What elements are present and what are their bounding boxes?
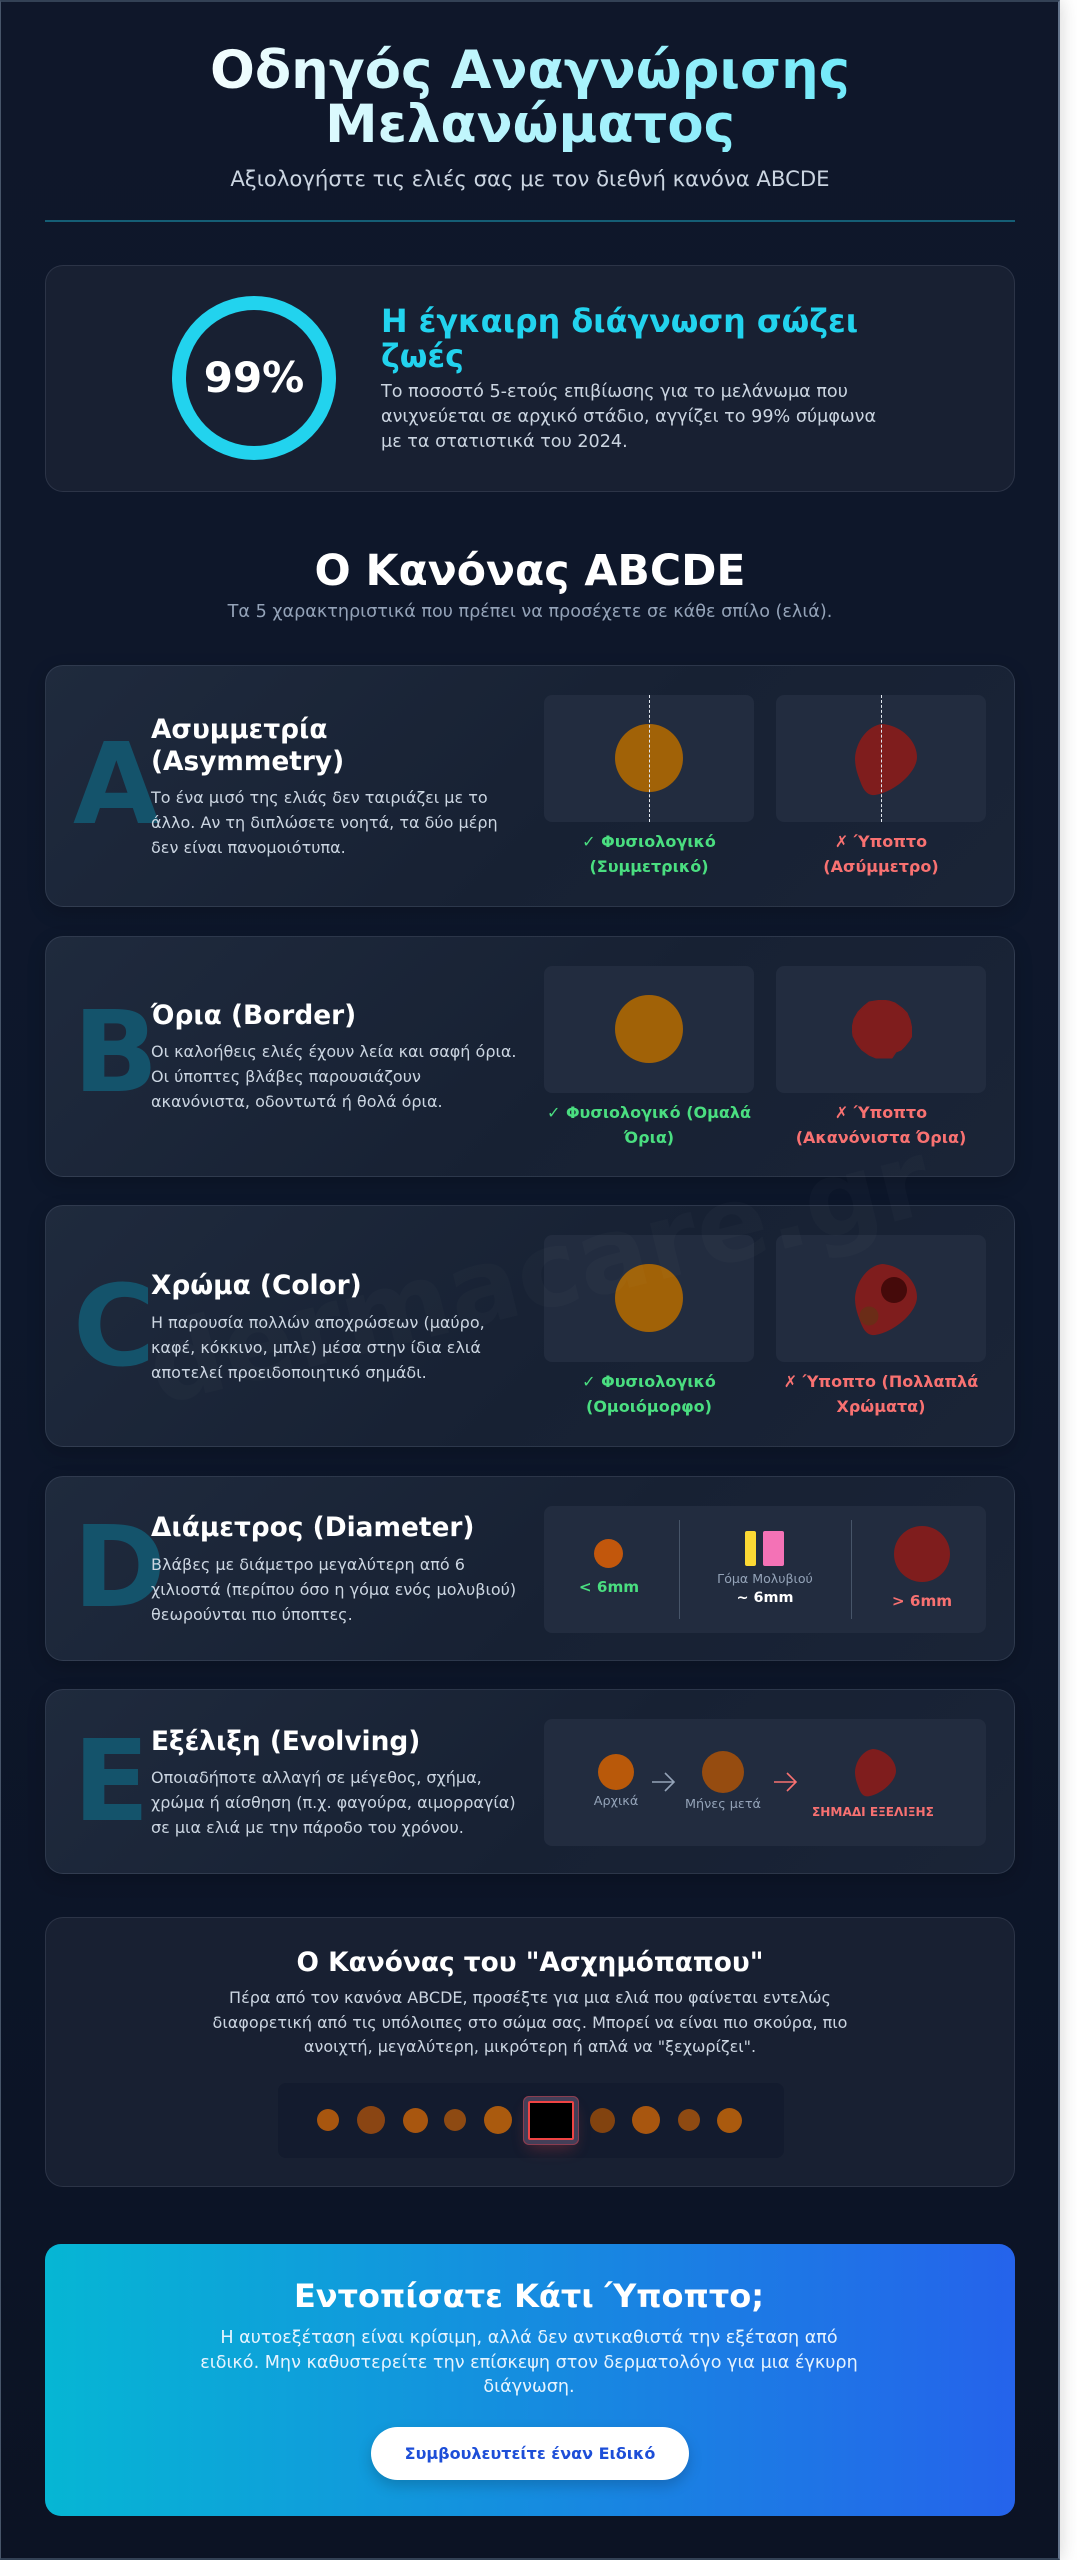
watermark: dermacare.gr bbox=[135, 1117, 942, 1429]
letter D: D bbox=[73, 1503, 166, 1633]
visual: irregular border mole bbox=[776, 966, 986, 1093]
text B: Οι καλοήθεις ελιές έχουν λεία και σαφή όρια. bbox=[151, 1042, 517, 1061]
stat heading bbox=[381, 303, 858, 375]
stat heading: ζωές bbox=[381, 338, 464, 375]
label: normal: ✓ Φυσιολογικό bbox=[582, 832, 716, 851]
visual: asymmetric mole bbox=[776, 695, 986, 822]
label approx 6mm: ~ 6mm bbox=[736, 1590, 794, 1606]
panel: C color bbox=[45, 1205, 1015, 1447]
panel: B border bbox=[45, 936, 1015, 1177]
stat description bbox=[380, 382, 876, 452]
text B: Οι ύποπτες βλάβες παρουσιάζουν bbox=[151, 1067, 421, 1086]
progress ring with 99%: 99% bbox=[204, 353, 304, 402]
text C: αποτελεί προειδοποιητικό σημάδι. bbox=[151, 1363, 427, 1382]
cta heading: Εντοπίσατε Κάτι Ύποπτο; bbox=[294, 2277, 764, 2315]
label: suspicious bbox=[784, 1372, 978, 1416]
heading E: Εξέλιξη (Evolving) bbox=[151, 1726, 420, 1757]
letter B: B bbox=[73, 988, 158, 1118]
eraser caption: Γόμα Μολυβιού bbox=[717, 1571, 813, 1586]
progress ring with 99% bbox=[172, 296, 336, 460]
rule text: διαφορετική από τις υπόλοιπες στο σώμα σας. Μπορεί να είναι πιο σκούρα, πιο bbox=[213, 2013, 847, 2032]
text B: ακανόνιστα, οδοντωτά ή θολά όρια. bbox=[151, 1092, 443, 1111]
stat description: με τα στατιστικά του 2024. bbox=[381, 432, 628, 452]
letter A: A bbox=[73, 720, 160, 850]
label: suspicious: (Ασύμμετρο) bbox=[823, 857, 939, 876]
visual: multicolour mole bbox=[776, 1235, 986, 1362]
text E bbox=[151, 1768, 516, 1837]
label: normal bbox=[582, 832, 716, 876]
letter E: E bbox=[73, 1717, 150, 1847]
stat description: Το ποσοστό 5-ετούς επιβίωσης για το μελάνωμα που bbox=[381, 382, 848, 402]
text B bbox=[151, 1042, 517, 1111]
section subheading: Τα 5 χαρακτηριστικά που πρέπει να προσέχετε σε κάθε σπίλο (ελιά). bbox=[228, 602, 832, 622]
heading C: Χρώμα (Color) bbox=[151, 1270, 362, 1301]
title: Οδηγός Αναγνώρισης bbox=[210, 40, 850, 101]
mole after months bbox=[702, 1751, 744, 1793]
text C: Η παρουσία πολλών αποχρώσεων (μαύρο, bbox=[151, 1313, 485, 1332]
label: suspicious bbox=[823, 832, 939, 876]
stat heading: Η έγκαιρη διάγνωση σώζει bbox=[381, 303, 858, 340]
rule text: ανοιχτή, μεγαλύτερη, μικρότερη ή απλά να "ξεχωρίζει". bbox=[304, 2037, 756, 2056]
subtitle: Αξιολογήστε τις ελιές σας με τον διεθνή κανόνα ABCDE bbox=[230, 166, 830, 191]
text C bbox=[151, 1313, 485, 1382]
label: normal: ✓ Φυσιολογικό (Ομαλά bbox=[547, 1103, 751, 1122]
text E: σε μια ελιά με την πάροδο του χρόνου. bbox=[151, 1818, 464, 1837]
label: normal bbox=[547, 1103, 751, 1147]
text D bbox=[151, 1555, 516, 1624]
label: suspicious: ✗ Ύποπτο (Πολλαπλά bbox=[784, 1372, 978, 1391]
panel: E evolving bbox=[45, 1689, 1015, 1874]
text D: θεωρούνται πιο ύποπτες. bbox=[151, 1605, 353, 1624]
panel: call to action bbox=[45, 2244, 1015, 2516]
label under 6mm: < 6mm bbox=[579, 1578, 639, 1596]
panel: ugly duckling rule bbox=[45, 1917, 1015, 2187]
cta text: Η αυτοεξέταση είναι κρίσιμη, αλλά δεν αντικαθιστά την εξέταση από bbox=[220, 2328, 838, 2348]
title bbox=[0, 44, 1060, 152]
heading D: Διάμετρος (Diameter) bbox=[151, 1512, 474, 1543]
cta text bbox=[200, 2328, 858, 2397]
text C: καφέ, κόκκινο, μπλε) μέσα στην ίδια ελιά bbox=[151, 1338, 481, 1357]
label: suspicious: Χρώματα) bbox=[836, 1397, 925, 1416]
label: suspicious: ✗ Ύποπτο bbox=[835, 832, 927, 851]
evolved mole bbox=[855, 1749, 896, 1796]
visual: uniform colour mole bbox=[544, 1235, 754, 1362]
cta text: διάγνωση. bbox=[483, 2377, 575, 2397]
warning caption: ΣΗΜΑΔΙ ΕΞΕΛΙΞΗΣ bbox=[812, 1805, 934, 1819]
label: suspicious: ✗ Ύποπτο bbox=[835, 1103, 927, 1122]
text D: Βλάβες με διάμετρο μεγαλύτερη από 6 bbox=[151, 1555, 465, 1574]
heading A bbox=[151, 714, 344, 777]
mole row bbox=[278, 2083, 784, 2158]
text A: δεν είναι πανομοιότυπα. bbox=[151, 838, 346, 857]
label: normal: Όρια) bbox=[624, 1128, 674, 1147]
text D: χιλιοστά (περίπου όσο η γόμα ενός μολυβιού) bbox=[151, 1580, 516, 1599]
rule text: Πέρα από τον κανόνα ABCDE, προσέξτε για μια ελιά που φαίνεται εντελώς bbox=[229, 1988, 831, 2007]
stat description: ανιχνεύεται σε αρχικό στάδιο, αγγίζει το 99% σύμφωνα bbox=[381, 407, 876, 427]
pencil eraser icon bbox=[745, 1531, 784, 1566]
text E: χρώμα ή αίσθηση (π.χ. φαγούρα, αιμορραγία) bbox=[151, 1793, 516, 1812]
cta text: ειδικό. Μην καθυστερείτε την επίσκεψη στον δερματολόγο για μια έγκυρη bbox=[200, 2353, 858, 2373]
initial mole bbox=[598, 1754, 634, 1790]
arrow 2 bbox=[774, 1772, 797, 1792]
heading B: Όρια (Border) bbox=[151, 1000, 356, 1031]
caption initial: Αρχικά bbox=[594, 1794, 638, 1809]
cta button bbox=[371, 2427, 689, 2480]
panel: 99% survival stat bbox=[45, 265, 1015, 492]
heading A: (Asymmetry) bbox=[151, 746, 344, 777]
title: Μελανώματος bbox=[325, 94, 735, 155]
odd one out bbox=[528, 2101, 574, 2140]
rule heading: Ο Κανόνας του "Ασχημόπαπου" bbox=[297, 1947, 763, 1978]
text A: άλλο. Αν τη διπλώσετε νοητά, τα δύο μέρη bbox=[151, 813, 498, 832]
label: normal: (Ομοιόμορφο) bbox=[586, 1397, 712, 1416]
caption months: Μήνες μετά bbox=[685, 1797, 761, 1812]
small mole bbox=[594, 1539, 623, 1568]
label: normal: ✓ Φυσιολογικό bbox=[582, 1372, 716, 1391]
text A bbox=[150, 788, 498, 857]
diameter comparison bbox=[544, 1506, 986, 1633]
panel: A asymmetry bbox=[45, 665, 1015, 907]
visual: symmetric mole bbox=[544, 695, 754, 822]
cta button: Συμβουλευτείτε έναν Ειδικό bbox=[405, 2444, 655, 2463]
section heading: Ο Κανόνας ABCDE bbox=[314, 546, 746, 596]
large mole bbox=[894, 1526, 950, 1582]
arrow 1 bbox=[652, 1772, 675, 1792]
visual: smooth border mole bbox=[544, 966, 754, 1093]
text E: Οποιαδήποτε αλλαγή σε μέγεθος, σχήμα, bbox=[151, 1768, 482, 1787]
label: suspicious: (Ακανόνιστα Όρια) bbox=[796, 1128, 966, 1147]
label: normal: (Συμμετρικό) bbox=[589, 857, 709, 876]
heading A: Ασυμμετρία bbox=[151, 714, 327, 745]
letter C: C bbox=[73, 1262, 155, 1392]
label: suspicious bbox=[796, 1103, 966, 1147]
label over 6mm: > 6mm bbox=[892, 1592, 952, 1610]
evolution timeline bbox=[544, 1719, 986, 1846]
text A: Το ένα μισό της ελιάς δεν ταιριάζει με το bbox=[151, 788, 488, 807]
label: normal bbox=[582, 1372, 716, 1416]
panel: D diameter bbox=[45, 1476, 1015, 1661]
rule text bbox=[213, 1988, 847, 2056]
